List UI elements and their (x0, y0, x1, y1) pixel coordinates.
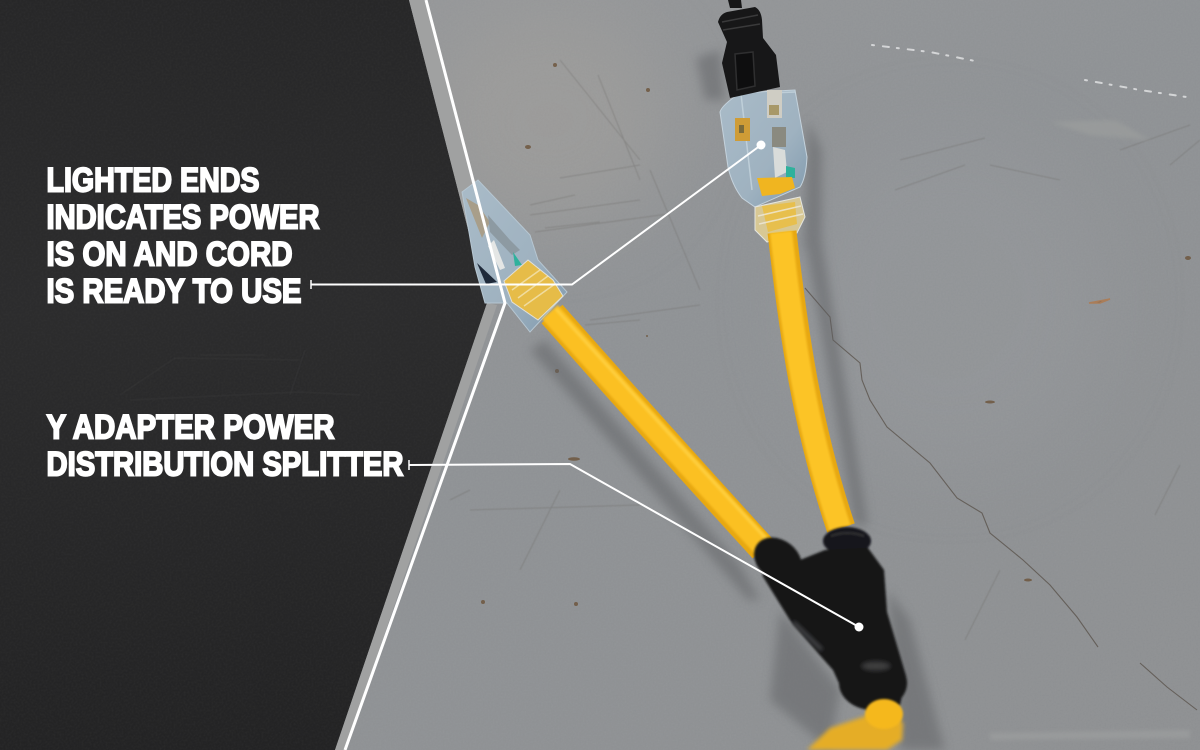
left panel: dark textured wedge (0, 0, 500, 750)
yellow cord end entering splitter (865, 699, 903, 729)
text block: lighted ends (46, 162, 320, 310)
text block: lighted ends: INDICATES POWER (46, 198, 320, 236)
floor smudge (1050, 120, 1150, 140)
text block: lighted ends: LIGHTED ENDS (46, 162, 260, 200)
text block: Y adapter (46, 408, 404, 484)
callout: lighted ends leader line (311, 140, 766, 289)
floor scratches (450, 60, 1200, 640)
black Y splitter body (745, 527, 907, 713)
text block: Y adapter: DISTRIBUTION SPLITTER (46, 446, 404, 484)
lighted plug: left cord end (462, 180, 567, 332)
lighted plug: upper cord end (720, 90, 807, 242)
floor specks (481, 63, 1191, 606)
callout: Y adapter leader line (409, 460, 864, 632)
yellow cord: right branch (781, 232, 841, 528)
floor crack (805, 288, 1197, 710)
black plug: top of cord (718, 0, 780, 98)
floor light streak (872, 45, 1193, 98)
pale strip between wedge and white line, lower (335, 303, 497, 750)
cord shadows (530, 50, 945, 750)
text block: lighted ends: IS ON AND CORD (46, 236, 292, 274)
pale strip between wedge and white line, upper (409, 0, 503, 303)
text block: lighted ends: IS READY TO USE (46, 272, 302, 310)
panel scratches (120, 350, 360, 400)
yellow cord: blurred foreground exit (807, 705, 903, 750)
divider chevron: white line (345, 0, 505, 750)
text block: Y adapter: Y ADAPTER POWER (46, 408, 334, 446)
yellow cord: left branch (550, 309, 770, 549)
